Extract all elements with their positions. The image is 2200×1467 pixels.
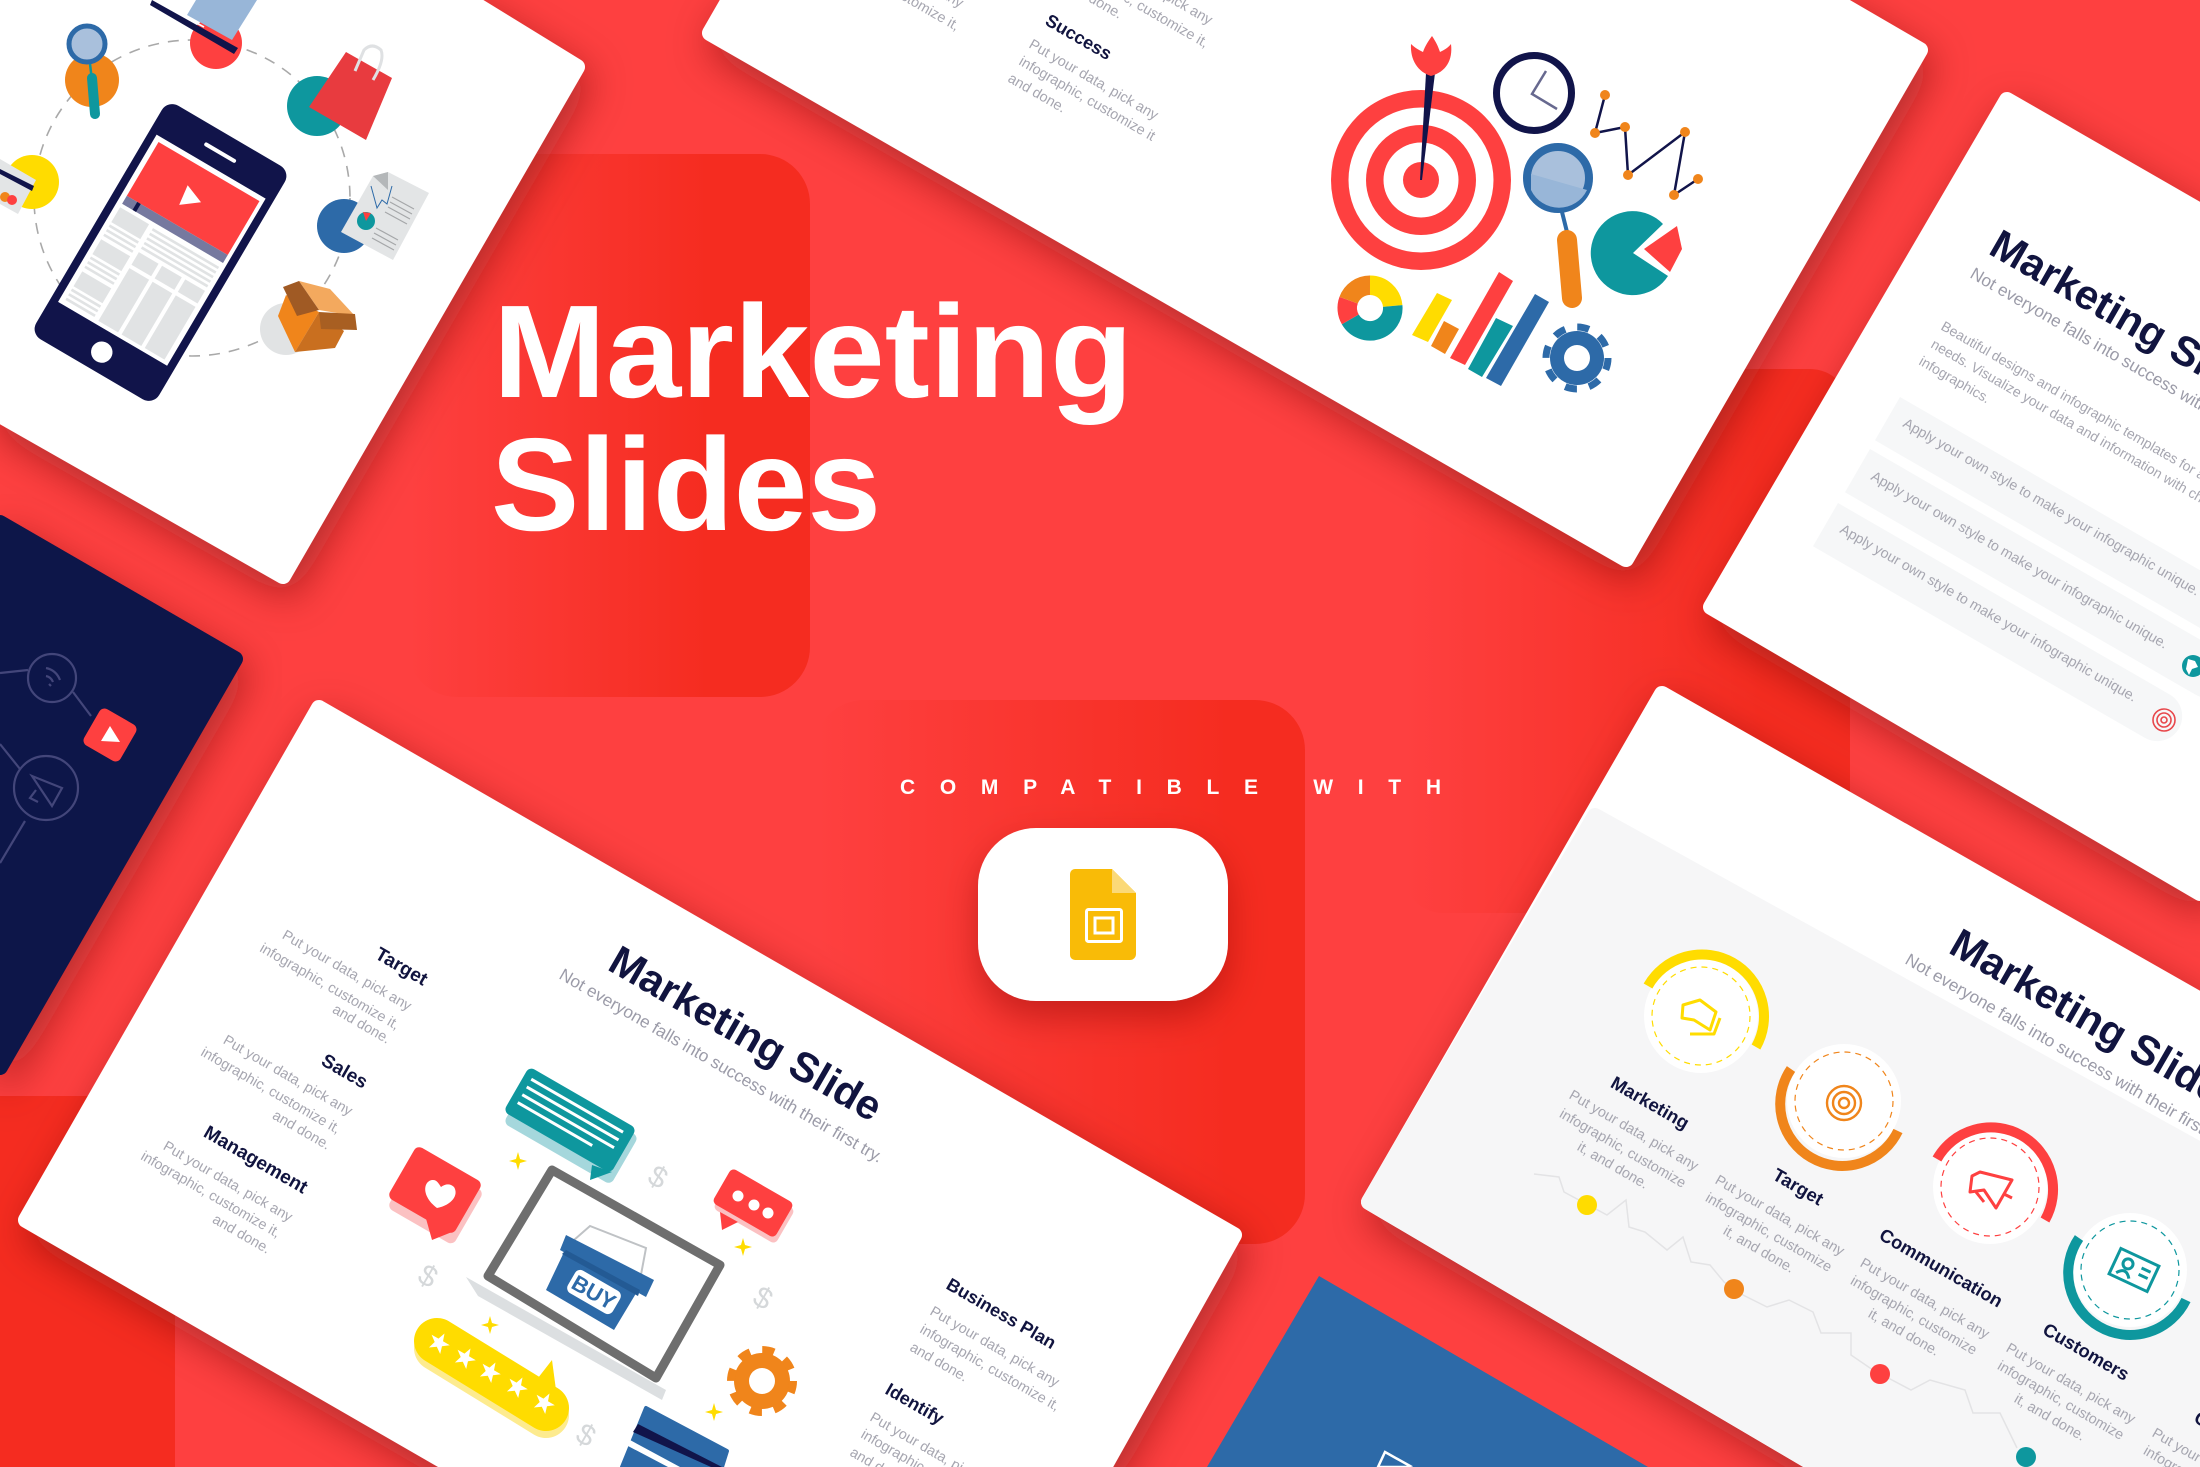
- step: Customers: [1994, 1213, 2187, 1445]
- text: Target: and done.: [330, 1002, 393, 1047]
- step: Target: infographic, customize: [1702, 1190, 1835, 1276]
- text: Sales: infographic, customize it,: [198, 1044, 343, 1137]
- heading: Marketing Slide: [602, 936, 891, 1130]
- icon: line chart: [1590, 90, 1703, 200]
- step: Customers: infographic, customize: [1994, 1358, 2127, 1444]
- text: Sales: Put your data, pick any: [220, 1032, 356, 1120]
- title: [491, 278, 1133, 558]
- icon: orange gear: [731, 1350, 793, 1412]
- icon: tags: [1682, 1000, 1720, 1034]
- text: Management: and done.: [210, 1212, 273, 1257]
- timeline dots: [1577, 1195, 2036, 1467]
- icons: dollar signs: $: [412, 1258, 443, 1295]
- step: Communication: infographic, customize: [1847, 1273, 1980, 1359]
- icon: target: [2153, 709, 2175, 731]
- icon: slides document: [1070, 869, 1136, 960]
- paragraph: infographics.: [1916, 353, 1993, 406]
- step: Communication: Communication: [1876, 1224, 2007, 1311]
- panel: text list slide: [1711, 100, 2200, 893]
- step: Target: Put your data, pick any: [1712, 1172, 1848, 1260]
- icon: megaphone: [1970, 1172, 2012, 1208]
- dark rounded square behind badge: [814, 700, 1305, 1244]
- step: Communication: [1847, 1127, 2053, 1360]
- icon: credit card on yellow circle: [0, 155, 59, 214]
- text: Management: Management: [200, 1122, 312, 1199]
- icon: video play: [81, 706, 139, 764]
- dashed orbit: [34, 40, 350, 356]
- text: Business Plan: and done.: [907, 1340, 970, 1385]
- text: Target: Target: [371, 944, 432, 991]
- step: Target: it, and done.: [1720, 1223, 1797, 1277]
- text: Success: [1005, 10, 1161, 145]
- text: Business Plan: infographic, customize it,: [917, 1322, 1062, 1415]
- icon: gear: [1546, 327, 1608, 389]
- list row three: [1813, 503, 2191, 750]
- zigzag timeline: [1534, 1174, 2017, 1448]
- panel: navy network slide: [0, 523, 235, 1067]
- icons: sparkles: [481, 1152, 752, 1421]
- network lines and nodes: [0, 654, 91, 863]
- text: Target: [257, 927, 432, 1047]
- icon: star rating: [425, 1328, 559, 1416]
- step: Marketing: Marketing: [1607, 1072, 1693, 1133]
- dark rounded square behind title: [407, 154, 810, 697]
- compatible with label: COMPATIBLE WITH: [900, 776, 1441, 799]
- text: Target: infographic, customize it,: [257, 940, 402, 1033]
- text: Success: and done.: [1005, 71, 1068, 116]
- icon: globe: [2182, 655, 2200, 677]
- step: Marketing: infographic, customize: [1556, 1106, 1689, 1192]
- step: Customers: it, and done.: [2011, 1391, 2088, 1445]
- icon: laptop with BUY basket: BUY: [567, 1270, 620, 1315]
- text: Sales: and done.: [270, 1108, 333, 1153]
- list row three: Apply your own style to make your infographic unique.: [1837, 522, 2139, 705]
- icon: smartphone: [30, 100, 291, 405]
- text: Business Plan: Put your data, pick any: [927, 1304, 1062, 1391]
- icon: heart bubble: [387, 1145, 484, 1245]
- icons: dollar signs: $: [642, 1159, 673, 1196]
- step: Target: Target: [1769, 1164, 1827, 1209]
- title: Slides: [491, 411, 881, 558]
- panel: blue slide: [1207, 1276, 1648, 1467]
- subtitle: Not everyone falls into success with their first try.: [556, 964, 887, 1167]
- panel: timeline slide: [1369, 694, 2200, 1467]
- icon: laptop on red circle: [150, 0, 257, 69]
- text: Sales: [198, 1032, 371, 1153]
- list row one: Apply your own style to make your infographic unique.: [1900, 416, 2200, 599]
- text: Target: Put your data, pick any: [279, 927, 415, 1015]
- icon: credit card: [622, 1408, 727, 1467]
- step: Marketing: [1556, 954, 1764, 1193]
- icon: report on blue circle: [317, 172, 429, 260]
- icon: id card: [2109, 1248, 2159, 1292]
- text: Sales: Sales: [317, 1050, 371, 1093]
- step: Communication: Put your data, pick any: [1857, 1255, 1993, 1343]
- icons: dollar signs: $: [570, 1417, 601, 1454]
- step: cropped fifth column: [2140, 1407, 2200, 1467]
- text: Identify: [847, 1379, 1003, 1467]
- icon: parcel box on grey circle: [260, 281, 357, 355]
- list row two: Apply your own style to make your infographic unique.: [1868, 469, 2170, 652]
- panel: phone slide: [0, 0, 577, 576]
- icons: dollar signs: $: [747, 1280, 778, 1317]
- icon: donut chart: [1347, 285, 1393, 331]
- icon: target with dart: [1331, 36, 1511, 270]
- dark square bottom left: [0, 1096, 175, 1467]
- step: Marketing: Put your data, pick any: [1566, 1087, 1702, 1175]
- text: Success: Put your data, pick any: [1026, 37, 1161, 124]
- icon: shopping bag on teal circle: [287, 46, 392, 140]
- dark rounded square at right: [1403, 369, 1850, 913]
- icon: magnifier: [1527, 147, 1589, 298]
- icon: magnifier on orange circle: [65, 26, 119, 114]
- text: Business Plan: Business Plan: [943, 1274, 1060, 1353]
- text: Success: infographic, customize it: [1016, 54, 1158, 145]
- step: Customers: Customers: [2039, 1318, 2133, 1385]
- text: Business Plan: [907, 1274, 1062, 1415]
- icon: teal chat bubble: [503, 1066, 639, 1185]
- list row two: [1845, 449, 2200, 707]
- text: Identify: Identify: [882, 1379, 947, 1428]
- icon: target rings: [1827, 1086, 1861, 1120]
- text: Management: [138, 1122, 312, 1257]
- list row one: [1875, 397, 2200, 670]
- step: Target: [1702, 1044, 1901, 1277]
- text: Management: infographic, customize it,: [138, 1148, 283, 1241]
- icon: bar chart: [1412, 272, 1549, 386]
- icon: pie chart: [1591, 211, 1682, 295]
- grey content area: [1369, 816, 2200, 1467]
- step: Communication: it, and done.: [1865, 1306, 1942, 1360]
- badge: Google Slides icon: [978, 828, 1228, 1001]
- text: Management: Put your data, pick any: [160, 1138, 296, 1226]
- step: Customers: Put your data, pick any: [2003, 1340, 2139, 1428]
- text: Success: Success: [1042, 10, 1115, 64]
- panel: marketing slide with shopping illustration: [26, 708, 1234, 1467]
- panel: target slide: [710, 0, 1920, 559]
- icons: dollar signs: [412, 1159, 778, 1454]
- icon: dots bubble: [712, 1168, 795, 1244]
- icon: clock: [1496, 56, 1572, 130]
- icon: small outline: [1378, 1452, 1410, 1467]
- icon: laptop with BUY basket: [466, 1170, 720, 1400]
- step: Marketing: it, and done.: [1574, 1139, 1651, 1193]
- title: Marketing: [493, 278, 1133, 425]
